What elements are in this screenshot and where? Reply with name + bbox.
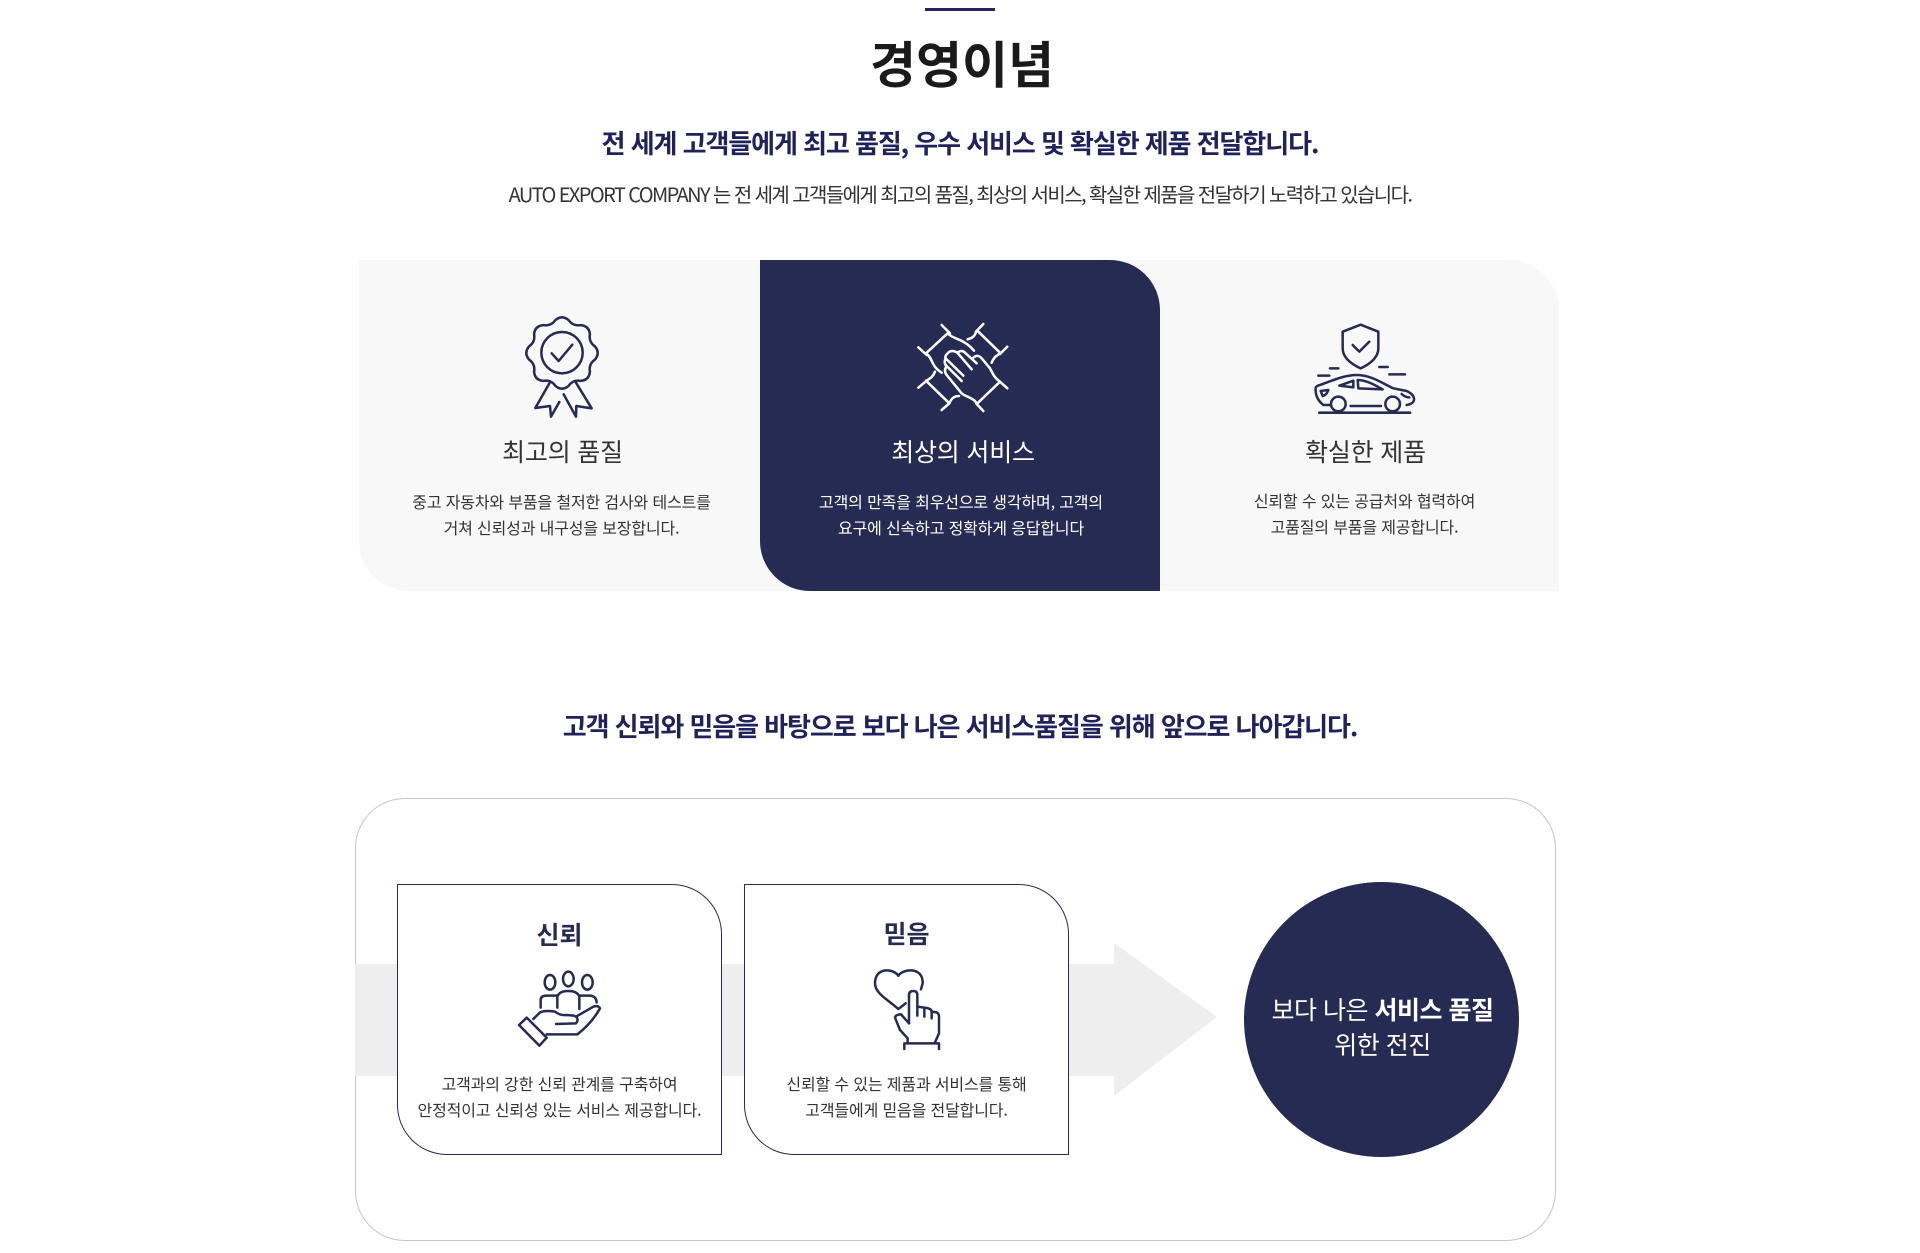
subheading: 전 세계 고객들에게 최고 품질, 우수 서비스 및 확실한 제품 전달합니다. [602,124,1318,161]
panel description: 고객의 만족을 최우선으로 생각하며, 고객의 [819,489,1103,513]
panel description: 거쳐 신뢰성과 내구성을 보장합니다. [444,515,679,539]
intro text: AUTO EXPORT COMPANY 는 전 세계 고객들에게 최고의 품질, 최상의 서비스, 확실한 제품을 전달하기 노력하고 있습니다. [509,179,1411,208]
icon: shield over car [1314,323,1416,414]
panel: three values background [359,260,1559,591]
icon: hand holding people [518,970,602,1047]
icon: rosette with check [525,316,599,418]
card description: 안정적이고 신뢰성 있는 서비스 제공합니다. [418,1097,701,1121]
panel description: 고품질의 부품을 제공합니다. [1271,514,1458,538]
panel description [1254,488,1475,538]
callout text: 보다 나은 서비스 품질 [1271,991,1494,1027]
title: 경영이념 [870,26,1054,98]
card description: 고객과의 강한 신뢰 관계를 구축하여 [442,1071,677,1095]
panel heading: 확실한 제품 [1305,433,1426,469]
title accent bar [925,8,995,11]
card heading: 신뢰 [536,916,582,952]
card heading: 믿음 [883,915,930,951]
callout text [1271,991,1494,1062]
panel: best quality [412,316,711,539]
panel description: 요구에 신속하고 정확하게 응답합니다 [838,515,1084,539]
callout text: 위한 전진 [1334,1026,1431,1062]
card: trust [397,884,722,1155]
panel heading: 최상의 서비스 [891,433,1035,469]
panel description: 신뢰할 수 있는 공급처와 협력하여 [1254,488,1475,512]
section heading: 고객 신뢰와 믿음을 바탕으로 보다 나은 서비스품질을 위해 앞으로 나아갑니다. [563,707,1357,744]
icon: stacked hands [917,322,1009,412]
arrow: grey progress arrow [355,943,1216,1096]
card description: 고객들에게 믿음을 전달합니다. [805,1097,1008,1121]
panel description: 중고 자동차와 부품을 철저한 검사와 테스트를 [412,489,711,513]
panel description [819,489,1103,539]
panel: reliable products [1254,323,1475,538]
icon: heart and pointing hand [874,969,940,1050]
panel: progress outline [355,798,1556,1241]
panel heading: 최고의 품질 [502,433,623,469]
card description [786,1071,1027,1121]
card: belief [744,884,1069,1155]
panel: best service [760,260,1160,591]
card description: 신뢰할 수 있는 제품과 서비스를 통해 [786,1071,1027,1095]
panel description [412,489,711,539]
callout: goal circle [1244,882,1519,1157]
card description [418,1071,701,1121]
